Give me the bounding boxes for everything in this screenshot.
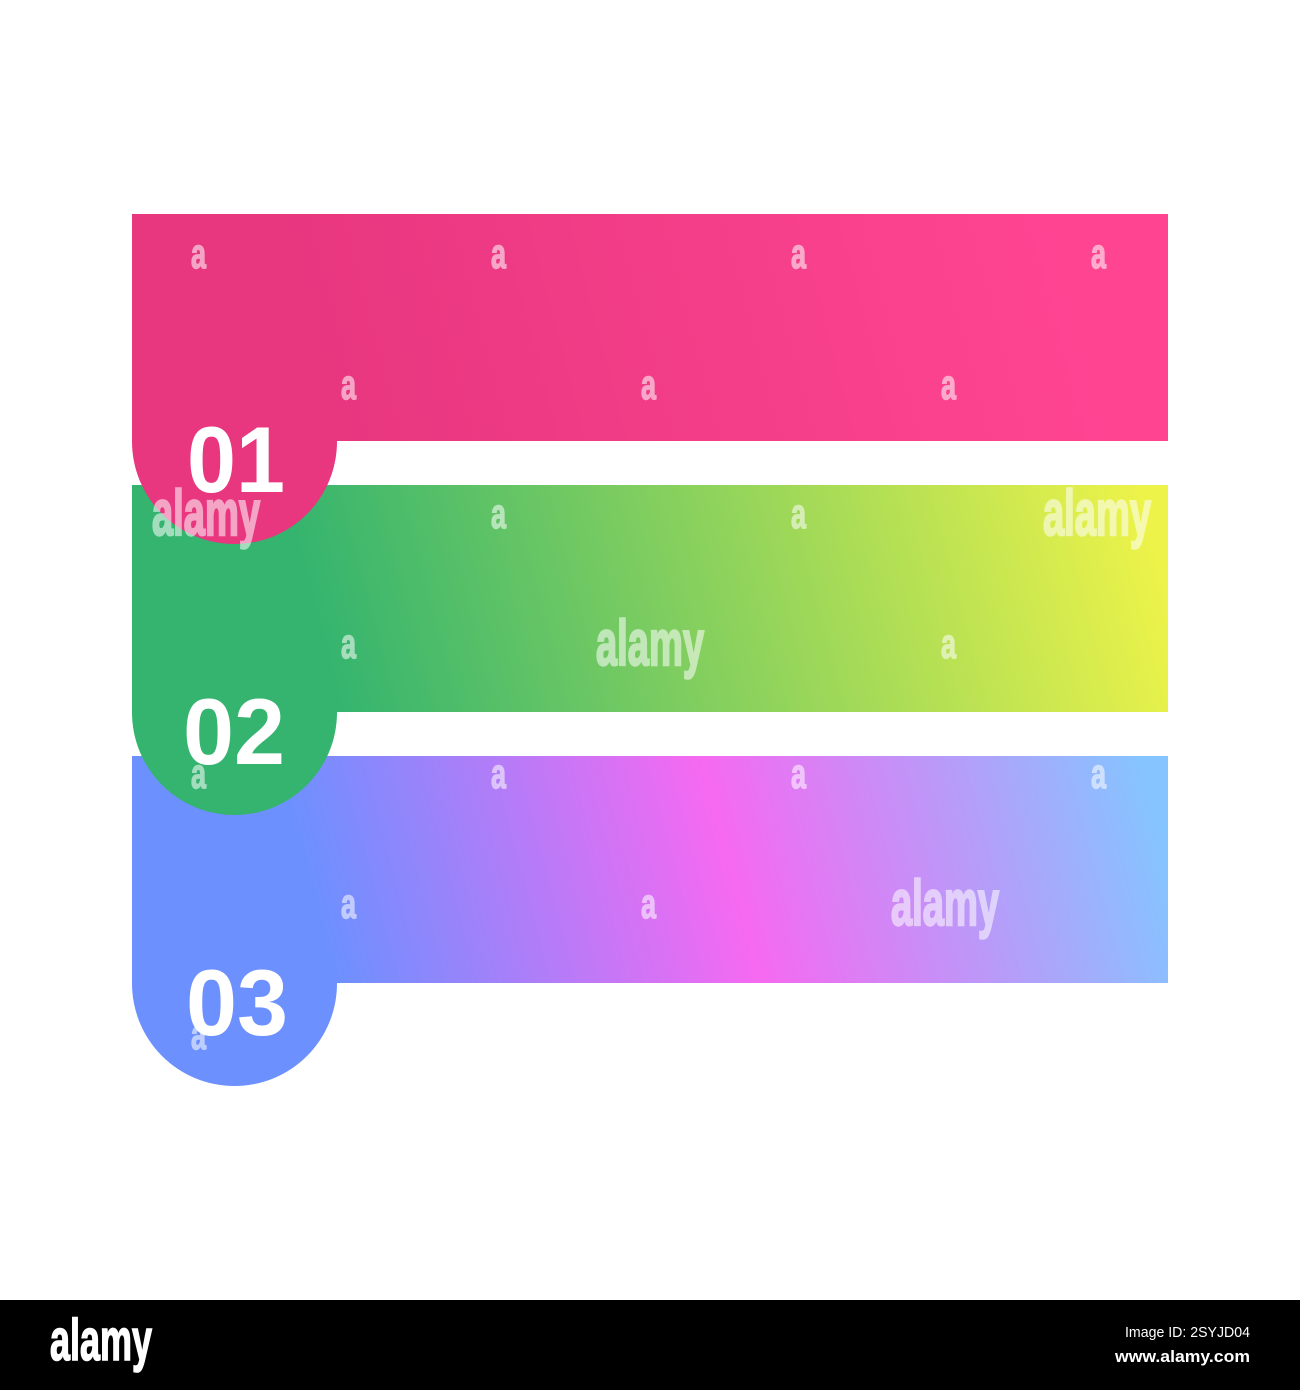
watermarks: alamy — [152, 477, 260, 549]
watermarks: a — [641, 880, 656, 927]
watermarks: a — [941, 361, 956, 408]
watermarks: a — [341, 880, 356, 927]
watermarks: a — [491, 230, 506, 277]
watermarks: a — [491, 490, 506, 537]
panel: banner 03 — [132, 756, 1168, 1086]
banner 02 bar — [132, 485, 1168, 712]
watermarks: alamy — [1043, 477, 1151, 549]
banner 03 bar — [132, 756, 1168, 983]
watermarks: alamy — [596, 607, 704, 679]
watermarks: a — [791, 490, 806, 537]
panel: banner 02 — [132, 485, 1168, 815]
footer image id: Image ID: 2SYJD04 — [1125, 1324, 1250, 1341]
banner 02 tab — [132, 711, 337, 815]
watermarks: alamy — [891, 867, 999, 939]
banner 01 bar — [132, 214, 1168, 441]
watermarks: a — [491, 750, 506, 797]
banner 01 tab — [132, 440, 337, 544]
watermarks: a — [791, 230, 806, 277]
watermarks: a — [791, 750, 806, 797]
watermarks: a — [1091, 230, 1106, 277]
footer url: www.alamy.com — [1114, 1347, 1250, 1366]
watermarks — [152, 230, 1151, 1058]
watermarks: a — [941, 620, 956, 667]
watermarks: a — [191, 750, 206, 797]
number 01: 01 — [187, 407, 285, 512]
watermarks: a — [191, 230, 206, 277]
footer bar — [0, 1300, 1300, 1390]
watermarks: a — [191, 1011, 206, 1058]
panel: banner 01 — [132, 214, 1168, 544]
watermarks: a — [341, 361, 356, 408]
watermarks: a — [341, 620, 356, 667]
number 02: 02 — [183, 679, 285, 784]
number 03: 03 — [186, 950, 288, 1055]
watermarks: a — [641, 361, 656, 408]
footer logo: alamy — [50, 1308, 152, 1373]
banner 03 tab — [132, 982, 337, 1086]
watermarks: a — [1091, 750, 1106, 797]
